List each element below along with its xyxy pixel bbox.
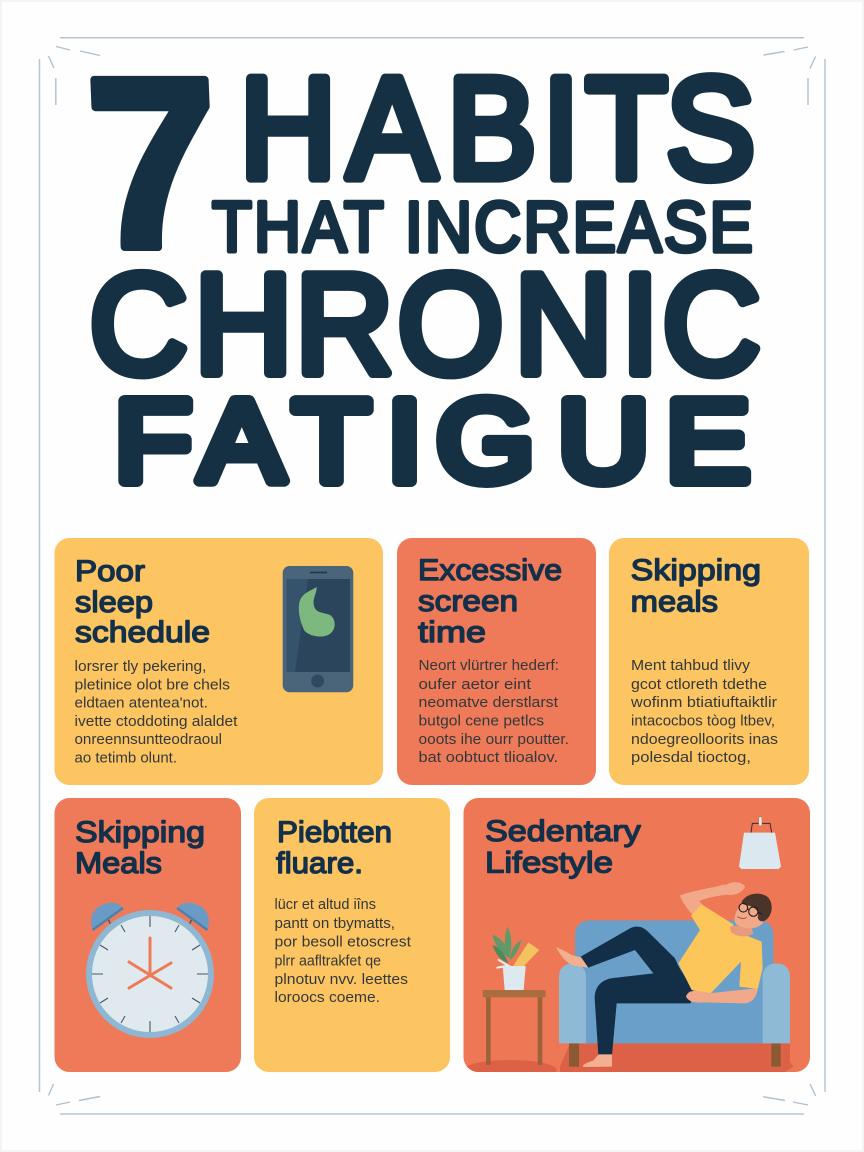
text block: skipping meals body: gcot ctloreth tdethe — [631, 676, 767, 693]
title line: CHRONIC: CHRONIC — [89, 245, 761, 404]
text block: piebtten body: plnotuv nvv. leettes — [274, 971, 408, 988]
heading: sedentary lifestyle: Lifestyle — [485, 847, 613, 880]
person: head — [735, 894, 772, 928]
panel: poor sleep schedule — [54, 538, 383, 785]
text block: poor sleep body: ivette ctoddoting alaldet — [74, 713, 238, 730]
text block: skipping meals body: Ment tahbud tlivy — [631, 657, 751, 674]
clock ticks — [92, 916, 208, 1032]
text block: excessive screen time body: Neort vlürtrer hederf: — [418, 657, 559, 674]
text block: excessive screen time body: oufer aetor eint — [418, 676, 532, 693]
text block: piebtten body: lücr et altud iîns — [274, 896, 376, 913]
clock hands — [129, 938, 171, 988]
text block: piebtten body: pantt on tbymatts, — [274, 915, 395, 932]
heading: piebtten fluare: Piebtten — [277, 816, 392, 849]
heading: poor sleep schedule — [75, 555, 210, 649]
heading: piebtten fluare — [276, 816, 392, 880]
title line: FATIGUE: FATIGUE — [115, 376, 750, 506]
heading: sedentary lifestyle — [485, 815, 641, 880]
heading: skipping meals: Skipping — [631, 554, 761, 587]
text block: skipping meals body: intacocbos tòog ltbev, — [631, 712, 775, 730]
heading: poor sleep schedule: sleep — [75, 586, 153, 619]
text block: piebtten body: plrr aafltrakfet qe — [274, 953, 381, 970]
text block: excessive screen time body: neomatve derstlarst — [418, 694, 559, 711]
text block: excessive screen time body: bat oobtuct tlioalov. — [418, 749, 558, 766]
heading: excessive screen time: screen — [418, 585, 518, 618]
heading: excessive screen time: Excessive — [418, 554, 562, 587]
heading: skipping meals: Meals — [75, 847, 162, 880]
icon: alarm clock — [86, 903, 214, 1038]
text block: piebtten body: loroocs coeme. — [274, 989, 380, 1006]
text block: excessive screen time body: ooots ihe ourr poutter. — [418, 731, 569, 748]
icon: smartphone — [283, 566, 353, 692]
clock bells — [91, 903, 209, 930]
heading: piebtten fluare: fluare. — [276, 847, 363, 880]
heading: skipping meals: meals — [631, 586, 718, 619]
person: torso and arms — [678, 882, 763, 1003]
text block: poor sleep body: eldtaen atentea'not. — [74, 694, 208, 712]
title — [82, 27, 761, 506]
text block: skipping meals body — [630, 657, 778, 766]
panel: sedentary lifestyle — [463, 798, 810, 1080]
text block: poor sleep body: onreennsuntteodraoul — [74, 731, 222, 748]
icon: hanging lamp — [739, 817, 781, 869]
heading: poor sleep schedule: Poor — [75, 555, 145, 588]
title numeral 7: 7 — [82, 27, 224, 299]
panel: skipping meals coral with clock — [54, 798, 241, 1072]
text block: skipping meals body: polesdal tioctog, — [631, 749, 751, 766]
text block: excessive screen time body — [418, 657, 569, 766]
text block: skipping meals body: ndoegreolloorits inas — [631, 731, 778, 748]
heading: skipping meals: Skipping — [75, 816, 205, 849]
table with plant — [483, 927, 546, 1065]
panel: garbled heading yellow — [254, 798, 450, 1072]
sofa — [559, 920, 790, 1067]
floor — [466, 1044, 793, 1072]
heading: skipping meals — [631, 554, 761, 619]
panel: excessive screen time — [397, 538, 596, 785]
text block: poor sleep body: ao tetimb olunt. — [74, 750, 177, 766]
text block: poor sleep body: pletinice olot bre chels — [74, 676, 230, 694]
text block: poor sleep body: lorsrer tly pekering, — [74, 658, 206, 675]
text block: poor sleep body — [74, 658, 238, 766]
panel: skipping meals yellow — [609, 538, 809, 785]
heading: skipping meals — [75, 816, 205, 880]
heading: sedentary lifestyle: Sedentary — [485, 815, 641, 848]
title line: THAT INCREASE: THAT INCREASE — [212, 188, 753, 267]
text block: excessive screen time body: butgol cene petlcs — [418, 712, 544, 730]
title line: HABITS: HABITS — [240, 48, 755, 209]
icon: green leaf on screen — [299, 587, 335, 637]
person: legs — [556, 927, 693, 1067]
text block: skipping meals body: wofinm btiatiuftaiktlir — [630, 694, 777, 711]
heading: poor sleep schedule: schedule — [75, 616, 210, 649]
heading: excessive screen time — [418, 554, 562, 649]
illustration: person on sofa — [463, 817, 793, 1080]
text block: piebtten body: por besoll etoscrest — [274, 934, 412, 951]
text block: piebtten body — [274, 896, 412, 1006]
heading: excessive screen time: time — [418, 616, 486, 649]
